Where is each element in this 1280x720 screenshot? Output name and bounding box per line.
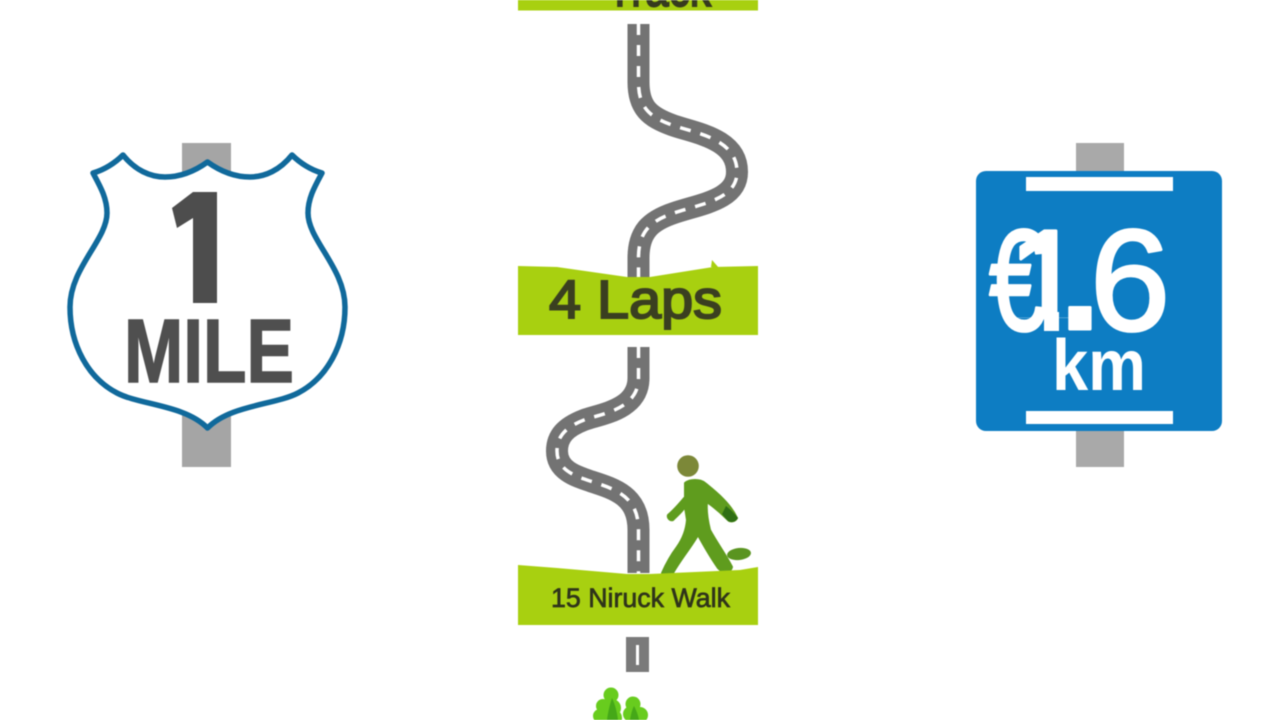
shield outline: [70, 155, 345, 428]
road segment two: [557, 347, 638, 573]
distance value: €: [989, 200, 1047, 361]
distance value: 1: [1007, 200, 1087, 361]
distance unit: km: [1052, 326, 1146, 406]
tree shading: [607, 698, 639, 720]
left tree: [593, 688, 622, 720]
distance value: [988, 227, 1166, 334]
tree icon: [593, 688, 648, 720]
person hand shading: [722, 506, 738, 522]
4 Laps banner shape: [518, 266, 758, 335]
stub surface: [626, 637, 649, 672]
person foot: [726, 547, 752, 561]
walk banner shape: [518, 565, 758, 625]
banner: 15 Minute Walk: [518, 565, 758, 625]
kilometre sign: [976, 143, 1222, 467]
kilometre post: [1076, 143, 1124, 467]
distance value: 6: [1090, 200, 1170, 361]
shield number: [171, 191, 218, 304]
blue sign panel: [976, 171, 1222, 431]
top banner: Track: [518, 0, 758, 18]
walking person icon: [662, 455, 752, 573]
4 Laps text: 4 Laps: [549, 270, 722, 330]
short road stub: [626, 637, 649, 672]
top banner shape: [518, 0, 758, 10]
person body: [662, 480, 737, 573]
road segment one: [638, 24, 737, 277]
mile shield sign: [70, 143, 345, 467]
distance value: .: [1060, 199, 1100, 360]
bottom white bar: [1026, 411, 1173, 424]
grass tuft: [711, 260, 719, 268]
shield post: [182, 143, 231, 467]
stub centre line: [636, 645, 639, 665]
person head: [677, 455, 699, 477]
banner: 4 Laps: [518, 260, 758, 335]
shield label: MILE: [124, 302, 294, 402]
top white bar: [1026, 177, 1173, 191]
shield number: 1: [158, 158, 246, 337]
right tree: [623, 696, 648, 720]
walk banner text: 15 Niruck Walk: [551, 583, 730, 613]
